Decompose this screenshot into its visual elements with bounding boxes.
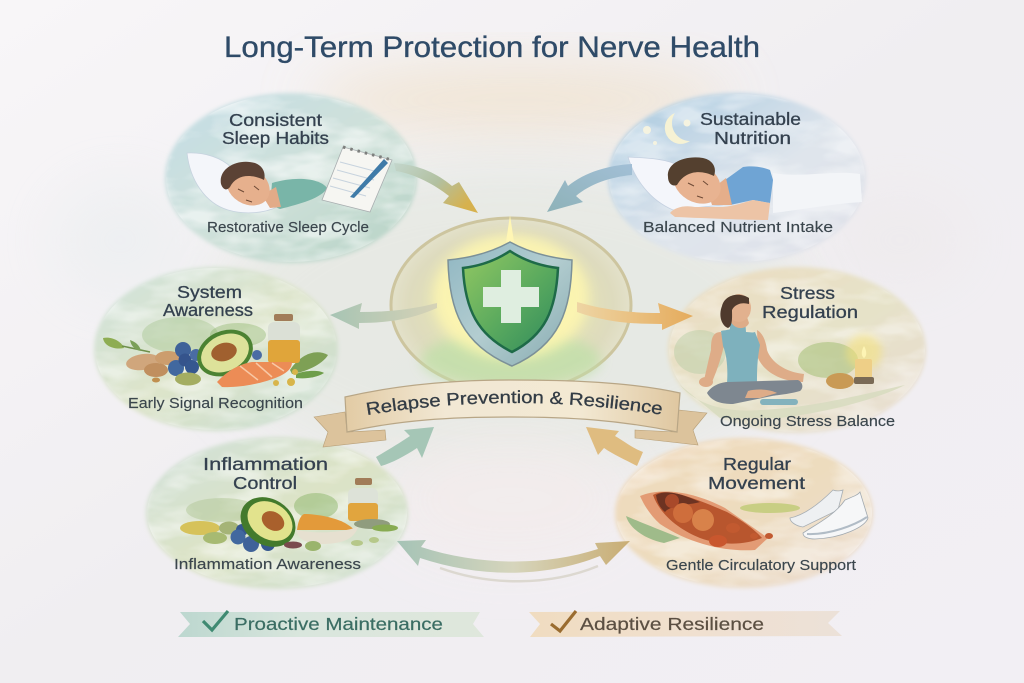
- illustration: healthy foods: [103, 314, 328, 387]
- caption: balanced nutrient intake: Balanced Nutrient Intake: [643, 219, 833, 236]
- banner: relapse prevention & resilience: [314, 379, 708, 448]
- panel: regular movement: Movement: [708, 473, 805, 493]
- illustration: sleeping man with notebook: [187, 147, 392, 213]
- tag: proactive maintenance: Proactive Maintenance: [234, 614, 443, 634]
- heading: sustainable nutrition: Sustainable: [700, 109, 801, 129]
- panel: consistent sleep habits: Sleep Habits: [222, 128, 329, 148]
- title: Long-Term Protection for Nerve Health: [224, 31, 760, 64]
- emblem: central ring and shield: [391, 215, 631, 392]
- panel: stress regulation: [668, 267, 926, 433]
- heading: inflammation control: Inflammation: [203, 454, 328, 474]
- banner: relapse prevention & resilience: Relapse Prevention & Resilience: [366, 390, 662, 415]
- caption: restorative sleep cycle: Restorative Sleep Cycle: [207, 219, 369, 236]
- tag: adaptive resilience: Adaptive Resilience: [580, 614, 764, 634]
- heading: system awareness: System: [177, 282, 242, 302]
- panel: consistent sleep habits: [165, 93, 417, 263]
- arrow: regular movement to ribbon: [586, 427, 643, 466]
- panel: sustainable nutrition: Nutrition: [714, 128, 791, 148]
- panel: sustainable nutrition: [608, 93, 866, 263]
- panel: stress regulation: Regulation: [762, 302, 858, 322]
- arrow: inflammation control to ribbon: [376, 427, 434, 466]
- caption: early signal recognition: Early Signal Recognition: [128, 395, 303, 412]
- arrow: shield to stress regulation: [577, 302, 693, 330]
- arrow: sleep habits to shield: [394, 163, 478, 213]
- tag: adaptive resilience: [529, 611, 842, 637]
- caption: inflammation awareness: Inflammation Awareness: [174, 556, 361, 573]
- arrow: shield to system awareness: [330, 303, 437, 329]
- illustration: sleeping man with moon: [628, 113, 862, 220]
- arrow: nutrition to shield: [547, 164, 632, 212]
- heading: consistent sleep habits: Consistent: [229, 110, 322, 130]
- caption: gentle circulatory support: Gentle Circulatory Support: [666, 557, 857, 574]
- illustration: blood vessel and sneakers: [626, 490, 868, 550]
- icon: shield: [448, 242, 572, 366]
- illustration: meditating woman with candle: [674, 294, 905, 418]
- panel: system awareness: [94, 267, 338, 431]
- panel: inflammation control: [146, 437, 408, 589]
- illustration: anti-inflammatory foods: [180, 478, 398, 557]
- panel: system awareness: Awareness: [163, 300, 253, 320]
- heading: stress regulation: Stress: [780, 283, 835, 303]
- tag: proactive maintenance: [178, 611, 484, 637]
- heading: regular movement: Regular: [723, 454, 791, 474]
- arrow: two-way loop at bottom: [397, 540, 630, 581]
- panel: inflammation control: Control: [233, 473, 297, 493]
- panel: regular movement: [615, 438, 873, 588]
- caption: ongoing stress balance: Ongoing Stress Balance: [720, 413, 895, 430]
